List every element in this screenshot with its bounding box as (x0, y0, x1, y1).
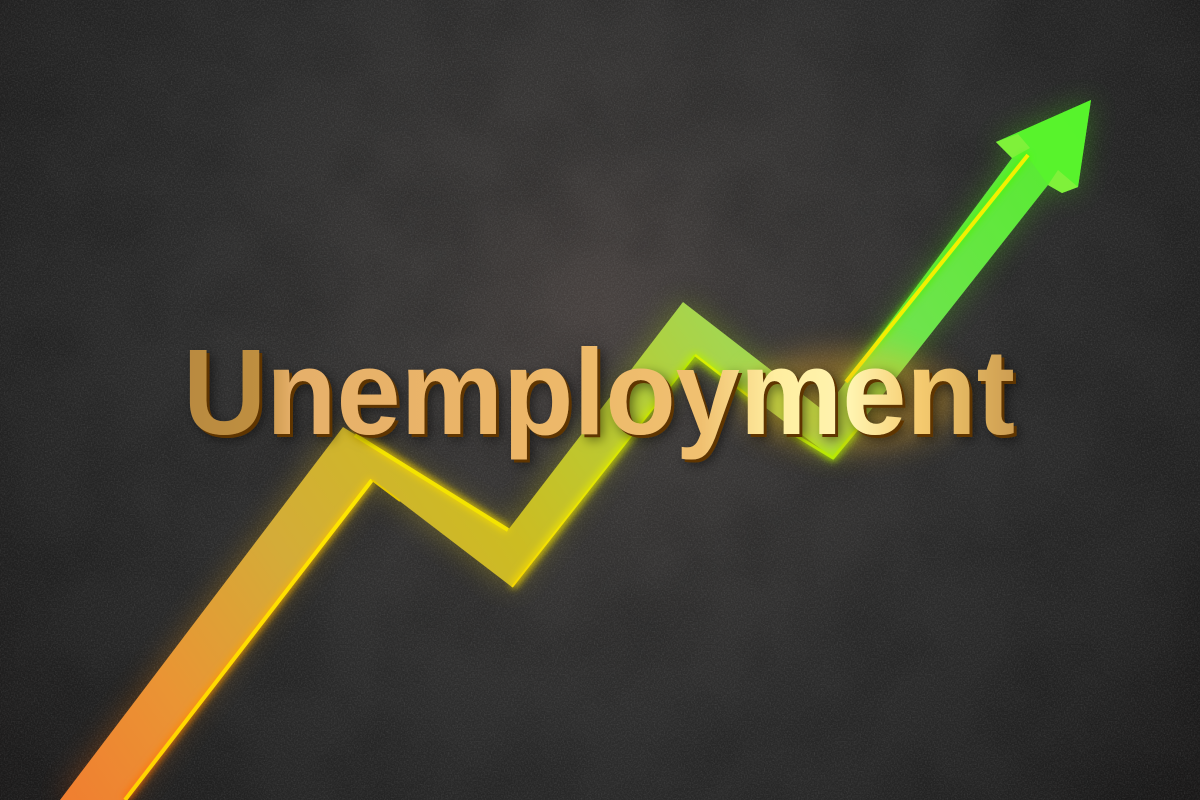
arrow bright edge glow (125, 155, 1028, 800)
arrow outer glow (60, 100, 1091, 800)
glow behind the word (740, 350, 960, 450)
rising neon arrow (60, 100, 1091, 800)
arrow head left barb (996, 134, 1030, 158)
arrow head right barb (1048, 170, 1078, 193)
arrow head highlight (996, 100, 1091, 193)
title: Unemployment: Unemployment (183, 324, 1015, 460)
arrow sharp edge lines (125, 155, 1028, 800)
arrow translucent band (60, 100, 1091, 800)
